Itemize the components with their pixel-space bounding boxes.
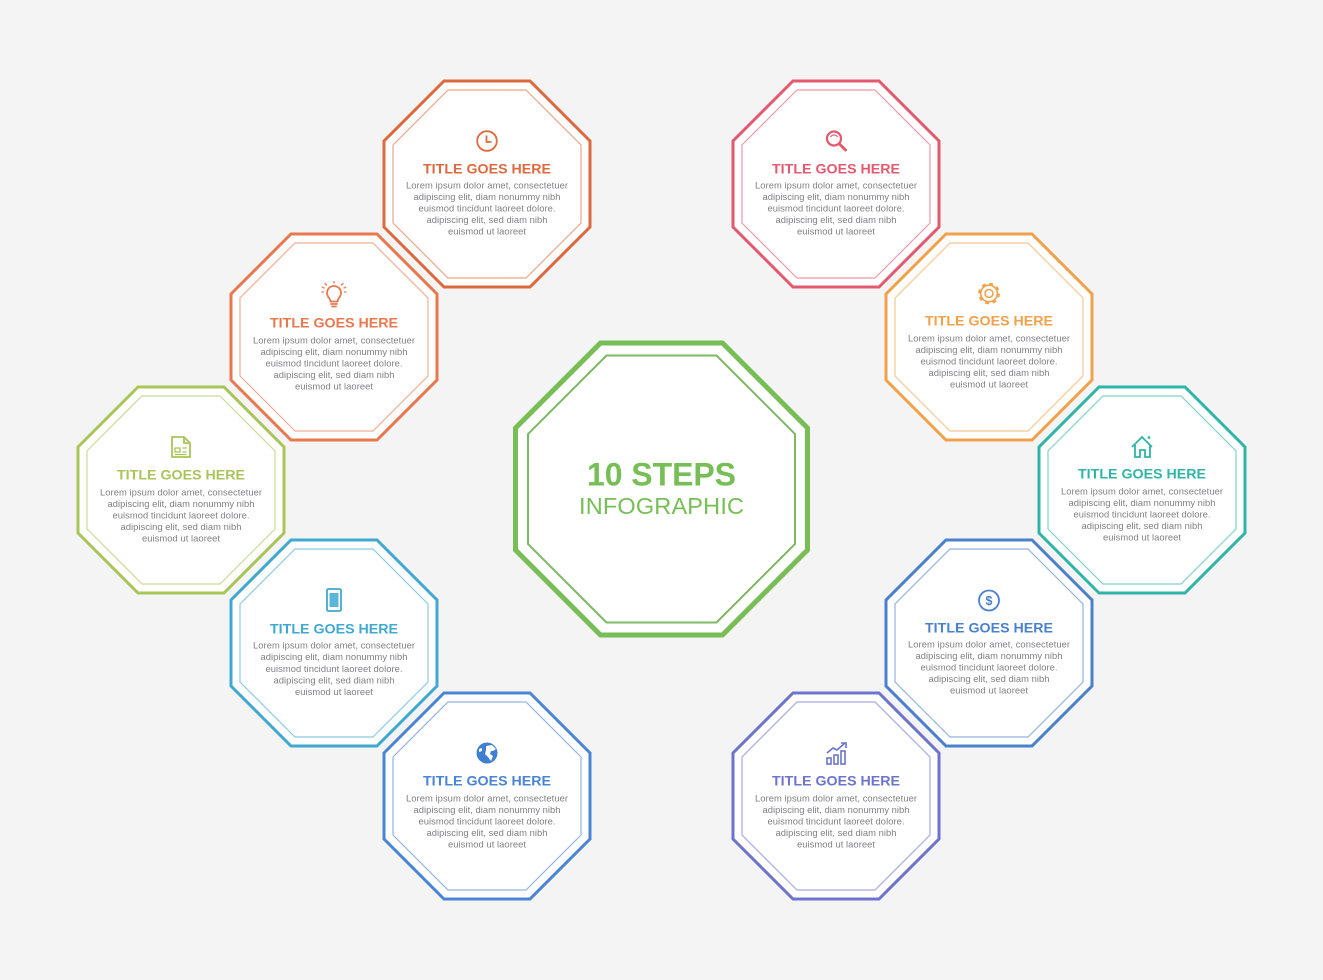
text block: adipiscing elit, sed diam nibh (426, 214, 548, 225)
title: TITLE GOES HERE (772, 162, 900, 178)
text block (406, 792, 568, 850)
text block: euismod ut laoreet (950, 684, 1028, 696)
panel: step 9 (886, 540, 1092, 746)
text block: euismod tincidunt laoreet dolore. (112, 510, 250, 520)
text block: euismod tincidunt laoreet dolore. (418, 816, 556, 826)
panel: center octagon (516, 343, 808, 635)
text block: adipiscing elit, diam nonummy nibh (414, 191, 560, 202)
panel: step 6 (733, 81, 939, 287)
text block (100, 486, 262, 544)
text block: adipiscing elit, sed diam nibh (120, 521, 242, 532)
text block: adipiscing elit, diam nonummy nibh (414, 804, 560, 815)
text block: euismod ut laoreet (142, 532, 220, 544)
text block: euismod ut laoreet (295, 686, 373, 697)
text block: euismod tincidunt laoreet dolore. (418, 202, 556, 214)
text block (253, 640, 415, 697)
text block: euismod tincidunt laoreet dolore. (266, 663, 402, 674)
icon: light bulb (322, 282, 346, 306)
text block: euismod tincidunt laoreet dolore. (1074, 508, 1210, 520)
text block: adipiscing elit, diam nonummy nibh (260, 651, 408, 662)
panel: step 5 (384, 693, 590, 899)
text block: Lorem ipsum dolor amet, consectetuer (100, 486, 262, 498)
text block: euismod ut laoreet (797, 838, 875, 850)
text block: Lorem ipsum dolor amet, consectetuer (755, 792, 917, 804)
panel: step 10 (733, 693, 939, 899)
text block: euismod ut laoreet (448, 838, 526, 850)
text block: Lorem ipsum dolor amet, consectetuer (908, 332, 1070, 344)
text block: euismod tincidunt laoreet dolore. (768, 202, 904, 214)
text block: euismod tincidunt laoreet dolore. (920, 356, 1058, 366)
text block: euismod ut laoreet (448, 226, 526, 236)
text block: Lorem ipsum dolor amet, consectetuer (253, 334, 415, 346)
title: TITLE GOES HERE (925, 314, 1053, 330)
icon: magnifier (827, 132, 846, 150)
text block: euismod ut laoreet (950, 378, 1028, 390)
text block: adipiscing elit, diam nonummy nibh (762, 191, 910, 202)
text block (253, 334, 415, 392)
text block: adipiscing elit, sed diam nibh (426, 827, 548, 838)
text block: Lorem ipsum dolor amet, consectetuer (406, 180, 568, 190)
text block: Lorem ipsum dolor amet, consectetuer (908, 638, 1070, 650)
text block: euismod tincidunt laoreet dolore. (768, 816, 904, 826)
text block: adipiscing elit, diam nonummy nibh (916, 650, 1062, 661)
text block: adipiscing elit, diam nonummy nibh (916, 344, 1062, 355)
icon: dollar coin: $ (986, 594, 993, 608)
text block: adipiscing elit, sed diam nibh (928, 673, 1050, 684)
text block (908, 332, 1070, 390)
icon: globe (476, 742, 498, 764)
panel: step 2 (231, 234, 437, 440)
icon: document (172, 437, 190, 457)
panel: step 3 (78, 387, 284, 593)
text block: Lorem ipsum dolor amet, consectetuer (253, 640, 415, 650)
text block: adipiscing elit, sed diam nibh (274, 369, 394, 380)
text block: euismod ut laoreet (797, 226, 875, 236)
text block: adipiscing elit, diam nonummy nibh (762, 804, 910, 815)
icon: growth chart (827, 743, 846, 764)
title: TITLE GOES HERE (117, 468, 245, 484)
icon: house (1132, 436, 1152, 457)
panel: step 1 (384, 81, 590, 287)
title: TITLE GOES HERE (772, 774, 900, 790)
subheading: INFOGRAPHIC (579, 493, 744, 519)
text block: euismod ut laoreet (1103, 532, 1181, 542)
panel: step 8 (1039, 387, 1245, 593)
text block: adipiscing elit, sed diam nibh (928, 367, 1050, 378)
text block (755, 180, 917, 236)
text block (1061, 486, 1223, 542)
text block: adipiscing elit, diam nonummy nibh (108, 498, 254, 509)
title: TITLE GOES HERE (925, 620, 1053, 636)
text block: adipiscing elit, sed diam nibh (776, 827, 896, 838)
icon: dollar coin (979, 590, 999, 610)
title: TITLE GOES HERE (423, 162, 551, 178)
text block: euismod ut laoreet (295, 380, 373, 392)
text block: Lorem ipsum dolor amet, consectetuer (755, 180, 917, 190)
icon: clock (477, 131, 497, 151)
title: TITLE GOES HERE (270, 316, 398, 332)
icon: phone (327, 589, 341, 611)
text block: adipiscing elit, diam nonummy nibh (260, 346, 408, 357)
heading: 10 STEPS (587, 456, 736, 492)
text block: adipiscing elit, diam nonummy nibh (1068, 497, 1216, 508)
title: TITLE GOES HERE (1078, 466, 1206, 482)
text block: euismod tincidunt laoreet dolore. (266, 358, 402, 368)
text block: adipiscing elit, sed diam nibh (1082, 520, 1202, 531)
text block (406, 180, 568, 236)
text block: Lorem ipsum dolor amet, consectetuer (1061, 486, 1223, 496)
text block: adipiscing elit, sed diam nibh (776, 214, 896, 225)
text block (755, 792, 917, 850)
panel: step 7 (886, 234, 1092, 440)
text block: adipiscing elit, sed diam nibh (274, 674, 394, 686)
text block: euismod tincidunt laoreet dolore. (920, 662, 1058, 672)
title: TITLE GOES HERE (270, 622, 398, 638)
icon: gear (979, 284, 999, 303)
panel: step 4 (231, 540, 437, 746)
text block: Lorem ipsum dolor amet, consectetuer (406, 792, 568, 804)
title: TITLE GOES HERE (423, 774, 551, 790)
text block (908, 638, 1070, 696)
